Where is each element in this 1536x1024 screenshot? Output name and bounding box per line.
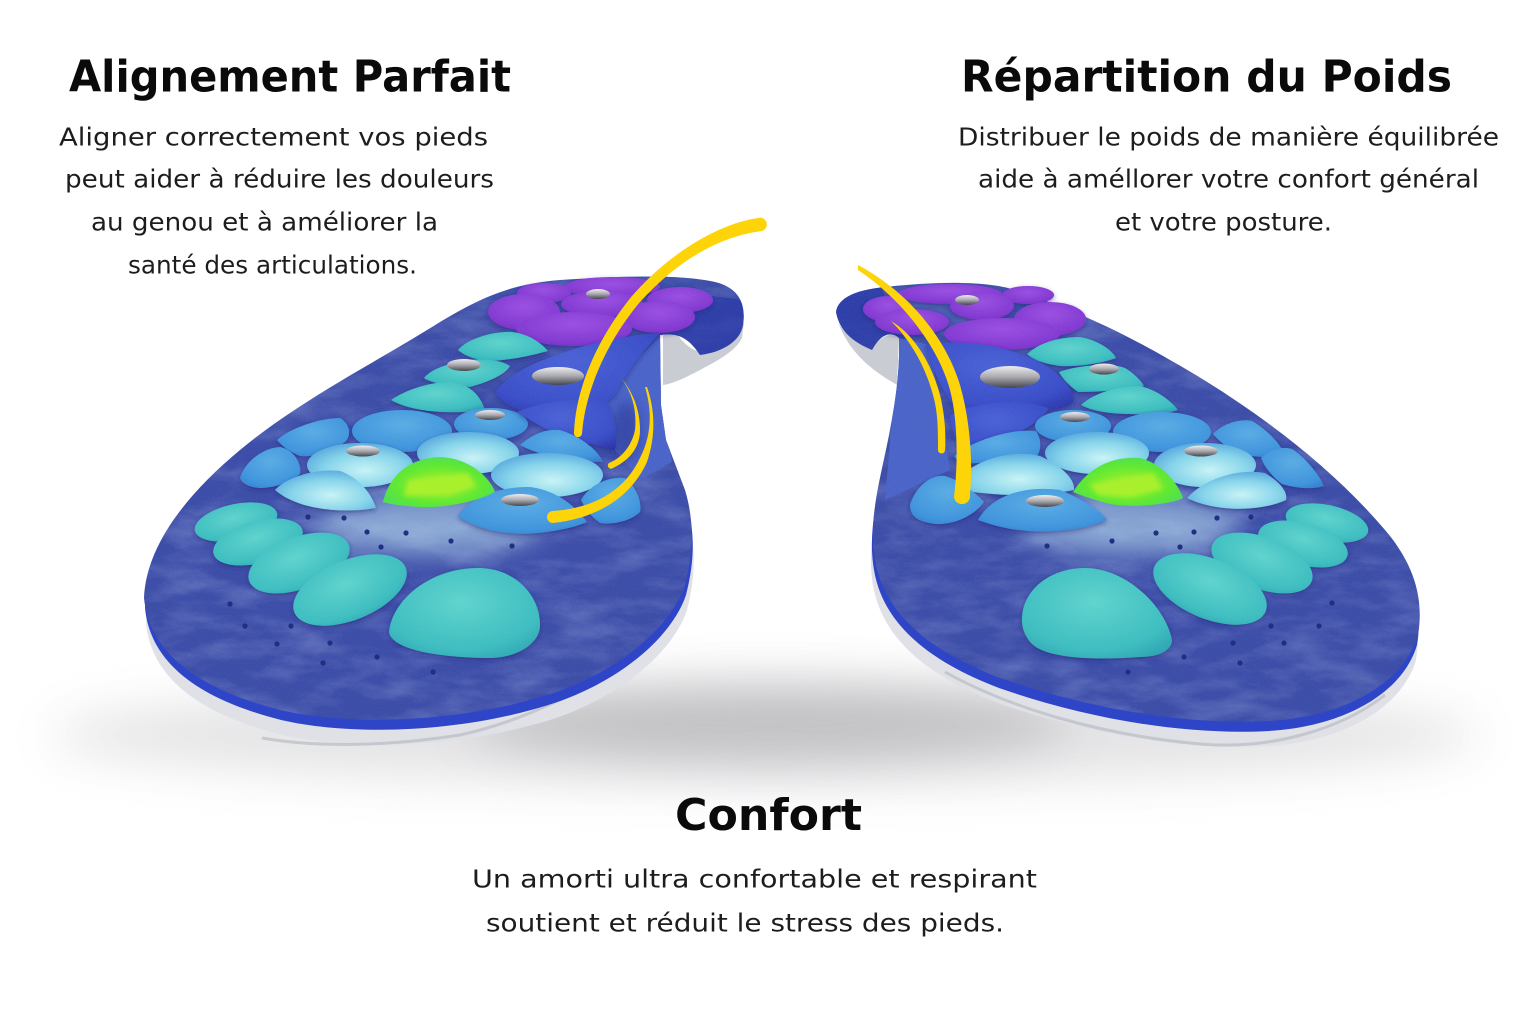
left insole (130, 270, 750, 745)
right perforation dots (1044, 514, 1335, 675)
text block: confort: Un amorti ultra confortable et respirant (472, 864, 1037, 894)
text block: confort: soutient et réduit le stress des pieds. (486, 908, 1004, 938)
text block: alignement: santé des articulations. (128, 250, 417, 280)
right fabric grain (830, 275, 1430, 735)
left teal rivet (447, 359, 481, 371)
left blue pads (240, 408, 528, 488)
text block: alignement (59, 122, 494, 280)
text block: confort (472, 864, 1037, 938)
right teal rivet (1089, 364, 1119, 374)
yellow lines: right insole (858, 265, 971, 504)
yellow long arc left (547, 387, 653, 523)
left purple forefoot pads (488, 277, 713, 346)
right green gel pad (1073, 458, 1183, 506)
text block: alignement: peut aider à réduire les douleurs (65, 164, 494, 194)
yellow short arc left (608, 378, 640, 469)
left arch rivet (532, 367, 584, 385)
left insole blue rim (145, 522, 693, 730)
yellow thin arc right (891, 321, 945, 454)
right teal pads (1027, 337, 1178, 414)
left perforation dots (227, 514, 515, 675)
right surface texture (830, 275, 1430, 735)
text block: répartition: Distribuer le poids de manière équilibrée (958, 122, 1499, 152)
right insole top surface (836, 283, 1420, 722)
text block: répartition: et votre posture. (1115, 208, 1332, 236)
right insole sole (871, 540, 1418, 746)
right dark blue arch pads (925, 342, 1073, 452)
left green gel pad (383, 457, 495, 507)
left purple rivet (586, 289, 610, 299)
right sole shading (945, 672, 1385, 745)
heading: Répartition du Poids: Répartition du Poids (961, 52, 1452, 102)
left dark blue arch pads (495, 333, 660, 450)
right silver rivets (1026, 412, 1218, 507)
right toe pads (1022, 497, 1372, 658)
left insole sole (146, 542, 694, 736)
right insole blue rim (872, 516, 1419, 732)
text block: alignement: au genou et à améliorer la (91, 208, 438, 236)
right purple forefoot pads (863, 284, 1086, 350)
right blue and pale pads (910, 410, 1324, 532)
left teal pads (391, 332, 548, 412)
left toe pads (191, 496, 540, 658)
right arch grey wedge (838, 322, 899, 385)
yellow main arc right (858, 265, 971, 504)
text block: répartition: aide à améllorer votre confort général (978, 164, 1479, 194)
left sole shading (262, 650, 640, 744)
right insole (830, 275, 1430, 747)
text block: alignement: Aligner correctement vos pieds (59, 122, 488, 152)
left arch grey wedge (663, 322, 744, 385)
left surface texture (130, 270, 750, 740)
ground shadow (50, 684, 1480, 783)
right purple rivet (955, 295, 979, 305)
left insole top surface (144, 276, 744, 720)
yellow main arc left (574, 218, 767, 437)
left fabric grain (146, 278, 742, 718)
right arch rivet (980, 366, 1040, 388)
text block: répartition (958, 122, 1499, 236)
left silver rivets (346, 410, 539, 506)
yellow lines: left insole (547, 218, 767, 523)
heading: Alignement Parfait: Alignement Parfait (69, 52, 511, 102)
heading: Confort: Confort (675, 790, 862, 841)
left pale centre pads (275, 430, 640, 534)
